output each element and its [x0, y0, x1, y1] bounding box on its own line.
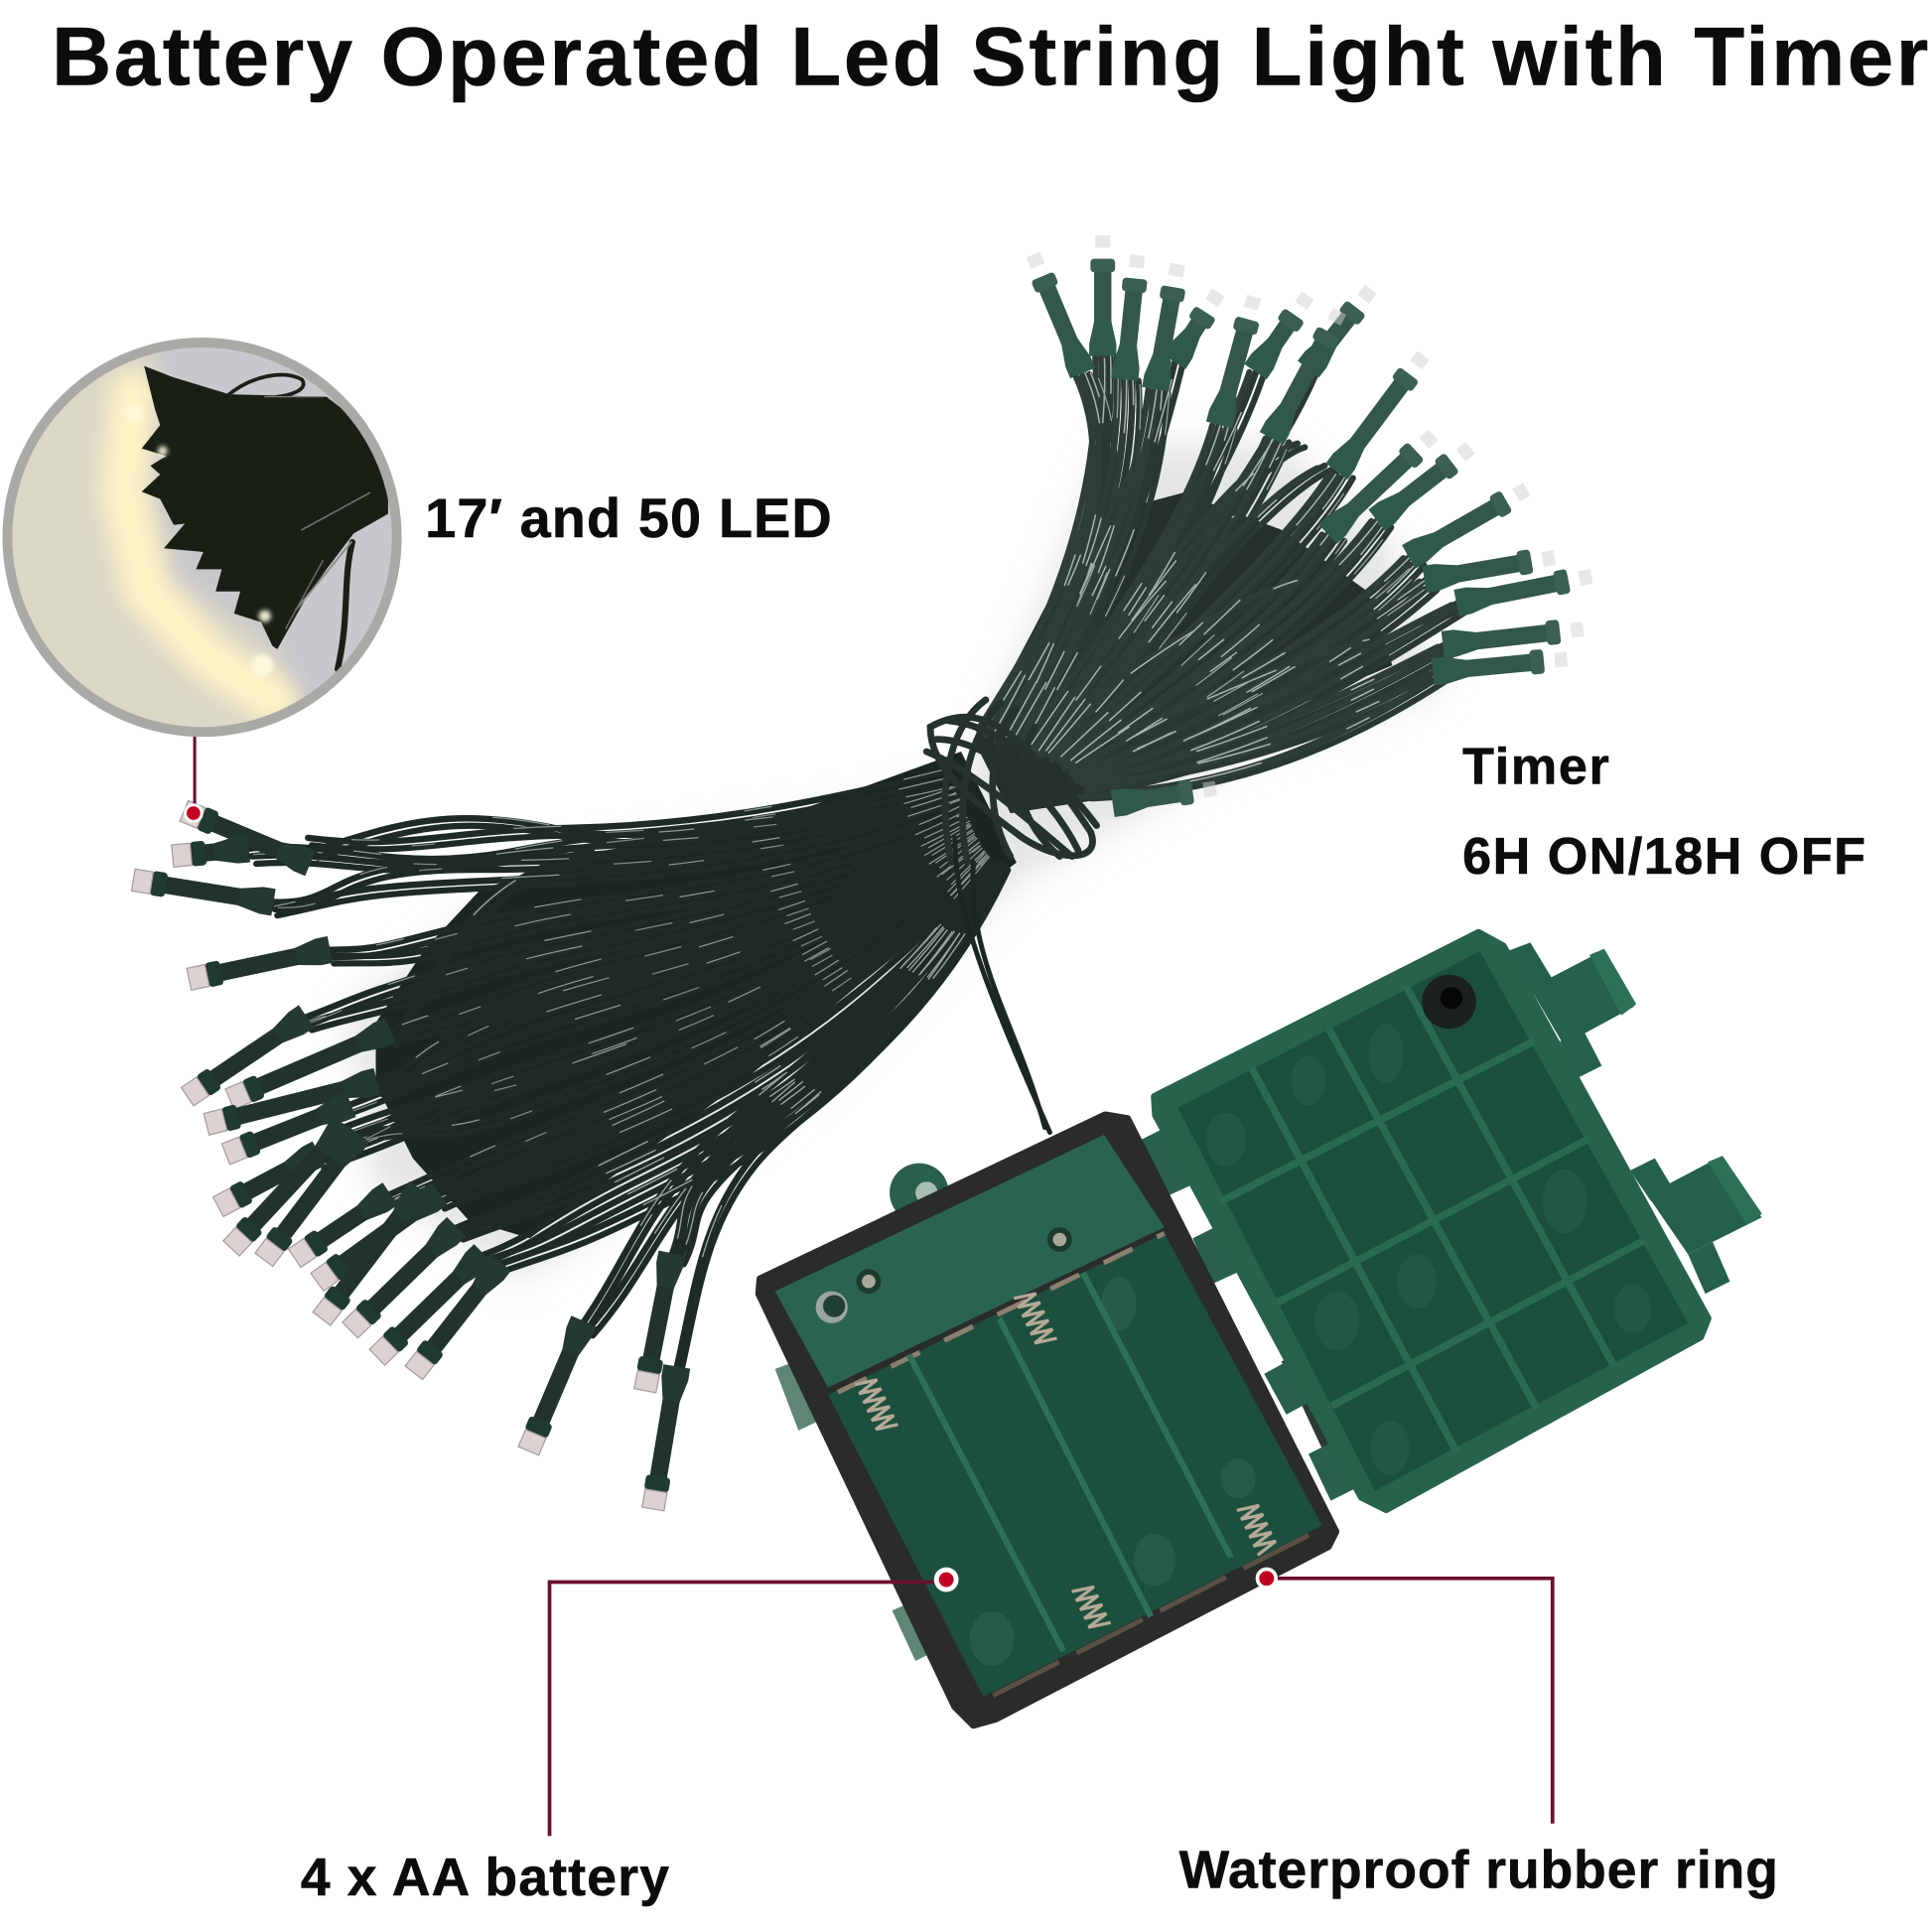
circle frame — [2, 338, 402, 737]
lead wire to battery box — [955, 838, 1049, 1133]
wire cluster — [142, 366, 388, 649]
soft shadow under the bundle — [345, 444, 1442, 1282]
right wire bundle core — [973, 492, 1392, 813]
lid hinges — [1141, 1124, 1363, 1501]
clip: upper — [1507, 942, 1636, 1078]
photo: LED string light bundle — [155, 262, 1565, 1487]
screw right — [1047, 1227, 1072, 1252]
clip: lower — [1630, 1156, 1762, 1294]
callout: waterproof rubber ring — [1179, 1568, 1778, 1899]
callout: 17' and 50 LED: 17′ and 50 LED — [425, 486, 832, 549]
contact strips — [838, 1233, 1309, 1696]
compartment embossed marks — [970, 1277, 1256, 1666]
battery box lid — [1141, 932, 1762, 1509]
callout: 4 x AA battery: 4 x AA battery — [301, 1849, 669, 1907]
battery box base — [759, 1115, 1335, 1725]
LED sockets: lower left — [155, 819, 676, 1487]
text: timer — [1462, 738, 1865, 886]
inset photo: glowing LEDs in a circle — [0, 333, 407, 763]
springs — [855, 1289, 1278, 1632]
text: timer: Timer — [1462, 738, 1609, 795]
black rubber seal frame — [759, 1115, 1335, 1725]
text: timer: 6H ON/18H OFF — [1462, 828, 1865, 886]
lid ribs — [1221, 986, 1644, 1451]
hanging loop — [890, 1164, 949, 1222]
power button — [816, 1292, 848, 1323]
callout: 4 x AA battery — [301, 1568, 959, 1907]
hinge bar — [1282, 1349, 1349, 1453]
lid embossed marks — [1206, 1024, 1651, 1475]
loose wires and gaps — [229, 375, 369, 669]
lid inner well — [1177, 951, 1688, 1491]
title: Battery Operated Led String Light with Timer — [52, 11, 1928, 103]
LED sockets: upper right — [1043, 262, 1565, 803]
left wire bundle core — [376, 752, 1017, 1238]
warm light wash — [12, 353, 292, 727]
photo content — [12, 347, 392, 727]
callout: 17' and 50 LED — [184, 486, 832, 823]
side tabs — [775, 1360, 935, 1661]
wire knot — [926, 700, 1097, 863]
battery compartment — [828, 1233, 1322, 1697]
top panel — [775, 1135, 1165, 1387]
screw left — [857, 1269, 881, 1294]
glowing spots — [127, 405, 274, 676]
lid outer frame — [1155, 932, 1708, 1509]
wires: stroke layers with highlights — [246, 352, 1468, 1376]
callout: waterproof rubber ring: Waterproof rubber ring — [1179, 1841, 1778, 1899]
compartment dividers — [909, 1273, 1231, 1651]
bright light band — [123, 394, 274, 700]
grommet — [1422, 975, 1476, 1029]
